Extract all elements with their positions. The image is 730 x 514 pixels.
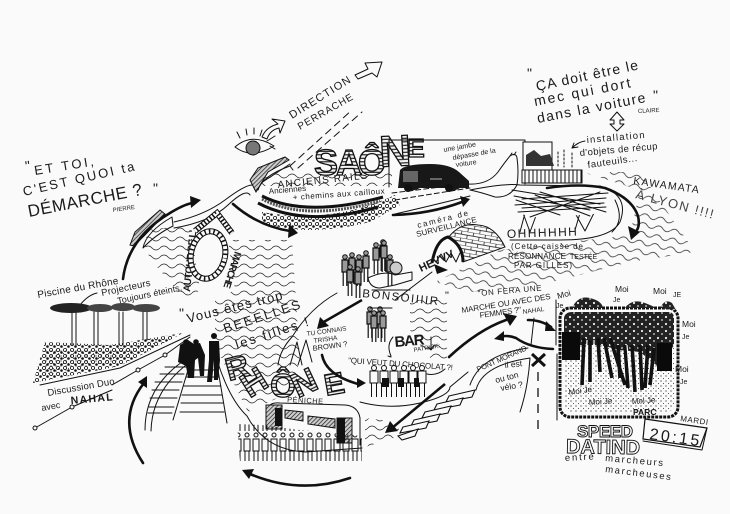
text: moi je around park: Je <box>556 303 564 310</box>
quote: on fera une marche: FEMMES ?" <box>479 305 522 320</box>
text: caméra de surveillance: SURVEILLANCE <box>415 215 478 239</box>
arrow: to people row <box>322 355 366 388</box>
text: moi je around park: Moi <box>675 364 689 374</box>
text: moi je inside park <box>568 385 656 417</box>
quote: et toi, c'est quoi ta démarche: " <box>153 180 158 196</box>
text: moi je around park: Moi <box>615 284 629 294</box>
title: RHÔNE letters: R <box>221 347 253 388</box>
quote: et toi, c'est quoi ta démarche: C'EST QUOI ta <box>21 158 136 199</box>
arrow: down to river <box>385 384 445 433</box>
text: tu connais trisha brown: TU CONNAIS <box>306 325 348 338</box>
icon: eye with arrow <box>235 119 285 155</box>
text: bonsoiiiir: BONSOIIIIR <box>362 288 439 308</box>
peniche: boat <box>266 395 360 445</box>
title: SAÔNE letters: A <box>336 142 362 183</box>
text: il est ou ton vélo: il est <box>504 358 523 370</box>
icon: direction arrow top <box>290 62 382 168</box>
stairs: pont morand stairs <box>398 390 475 440</box>
bridge: lower bridge hatch <box>130 210 173 248</box>
text: piscine du rhone: Piscine du Rhône <box>37 276 120 301</box>
text: piscine du rhone: Projecteurs <box>100 278 152 299</box>
text: piscine du rhone <box>37 276 183 306</box>
text: installation d'objets de récup: installation <box>586 130 645 146</box>
text: bar <box>388 331 441 357</box>
text: kawamata à lyon: KAWAMATA <box>633 175 700 196</box>
label: direction perrache: DIRECTION <box>287 74 353 122</box>
text: moi je around park: Moi <box>682 319 696 329</box>
text: discussion duo avec nahal: avec <box>41 400 62 413</box>
box: tree tops above park <box>572 297 676 310</box>
title: RHÔNE letters: N <box>285 361 324 405</box>
icon: x and dashed road <box>531 300 557 432</box>
text: bonsoiiiir: " <box>445 290 449 302</box>
text: anciens rails: ANCIENS RAILS <box>277 171 368 191</box>
quote: ça doit être le mec: dans la voiture <box>536 89 647 126</box>
text: autour de l'O marche: AUTOUR DE L' <box>182 230 199 292</box>
text: speed dating <box>566 422 640 459</box>
crowd: people at peniche <box>218 363 468 461</box>
text: entre marcheurs marcheuses <box>565 451 672 483</box>
text: jambe: dépasse de la <box>452 147 496 162</box>
text: moi je around park: Je <box>613 297 620 304</box>
text: installation d'objets de récup: d'objets de récup <box>579 141 658 159</box>
quote: et toi, c'est quoi ta démarche <box>21 154 158 221</box>
quote: ça doit être le mec: " <box>653 87 658 103</box>
tunnel <box>432 225 505 274</box>
arrow: left bank up <box>123 196 201 279</box>
quote: ça doit être le mec: " <box>527 65 532 81</box>
text: moi je around park: Je <box>680 379 688 386</box>
title: RHÔNE letters: H <box>234 360 275 405</box>
text: moi je around park <box>556 284 696 386</box>
arrow: bottom <box>242 469 350 486</box>
illustration: piscine parasols <box>50 303 160 345</box>
clock: mardi 20:15 <box>643 414 709 450</box>
waves: river areas <box>145 172 695 447</box>
text: speed dating: DATIND <box>566 436 640 459</box>
text: discussion duo avec nahal: NAHAL <box>70 391 114 407</box>
quote: et toi, c'est quoi ta démarche: " <box>24 157 31 174</box>
peniche: boat: PÉNICHE <box>287 395 323 406</box>
title: RHÔNE letters <box>221 340 347 405</box>
text: entre marcheurs marcheuses: marcheurs <box>605 453 664 469</box>
bridge: pont morand: PONT MORAND <box>475 343 529 374</box>
quote: on fera une marche: NAHAL <box>522 306 545 316</box>
title: SAÔNE letters <box>314 126 425 183</box>
text: hevvv <box>395 248 457 300</box>
text: hevvv: HEVVV <box>417 248 457 275</box>
text: bar: PATRICK: <box>413 343 441 354</box>
text: ohhh and cette caisse <box>507 225 598 270</box>
park: parc panel with trees <box>560 308 678 417</box>
text: ohhh and cette caisse: RÉSONNANCE <box>508 252 566 261</box>
text: caméra de surveillance: caméra de <box>416 208 469 230</box>
text: speed dating: SPEED <box>577 422 633 441</box>
small arrow to installation <box>572 141 585 148</box>
bridge: pont morand <box>470 343 530 412</box>
text: moi je around park: JE <box>673 292 682 299</box>
text: anciens rails <box>268 171 385 202</box>
text: il est ou ton vélo <box>494 358 524 393</box>
arrows: park in and out <box>494 320 556 349</box>
title: SAÔNE letters: N <box>378 126 412 177</box>
title: SAÔNE letters: Ô <box>358 141 386 183</box>
quote: vous êtes trop beeelles: les filles ! <box>233 314 310 352</box>
text: moi je around park: Moi <box>653 286 667 296</box>
bridge: upper bridge hatch and road <box>174 157 293 228</box>
text: ohhh and cette caisse: TESTÉE <box>570 252 598 261</box>
rails: curved tracks and gravel <box>258 184 470 230</box>
stairs: main staircase <box>145 355 227 431</box>
text: entre marcheurs marcheuses: entre <box>565 451 594 464</box>
text: moi je inside park: Moi Je <box>632 395 656 406</box>
text: installation d'objets de récup <box>579 130 658 171</box>
text: autour de l'O marche: MARCHE <box>220 250 243 290</box>
text: moi je around park: Moi <box>556 288 572 301</box>
text: discussion duo avec nahal <box>41 376 115 413</box>
text: tu connais trisha brown: BROWN ? <box>312 339 348 353</box>
text: anciens rails: + chemins aux cailloux <box>293 187 385 202</box>
icon: ring O and ladder <box>186 213 232 282</box>
text: qui veut du chocolat: "QUI VEUT DU CHOCOLAT ?! <box>348 356 453 372</box>
text: piscine du rhone: Toujours éteints. <box>116 282 183 306</box>
quote: vous êtes trop beeelles: Vous êtes trop <box>185 288 284 326</box>
arrow: double vertical <box>610 112 624 131</box>
text: ohhh and cette caisse: OHHHHHH <box>507 225 577 241</box>
line: walking route with nodes <box>33 337 190 430</box>
arrow: from bonsoir to Rhône <box>278 293 362 365</box>
text: moi je inside park: PARC <box>633 407 656 417</box>
text: jambe <box>443 141 496 169</box>
arrow: along road <box>393 196 470 215</box>
text: installation d'objets de récup: fauteuils... <box>587 153 638 171</box>
text: jambe: une jambe <box>443 141 477 154</box>
car: van <box>398 164 469 192</box>
quote: ça doit être le mec: mec qui dort <box>533 75 632 109</box>
quote: ça doit être le mec: ÇA doit être le <box>534 57 640 94</box>
text: il est ou ton vélo: vélo ? <box>500 379 524 393</box>
crowd of dots: pool bank <box>33 333 190 385</box>
clock: mardi 20:15: 20:15 <box>648 426 700 450</box>
quote: et toi, c'est quoi ta démarche: PIERRE <box>112 205 135 214</box>
text: il est ou ton vélo: ou ton <box>494 369 520 385</box>
quote: et toi, c'est quoi ta démarche: DÉMARCHE ? <box>26 180 144 221</box>
road: kawamata road <box>395 185 622 240</box>
quote: on fera une marche: MARCHE OU AVEC DES <box>461 292 551 315</box>
quote: ça doit être le mec <box>527 57 660 126</box>
quote: on fera une marche <box>461 283 551 320</box>
text: tu connais trisha brown: TRISHA <box>313 335 339 345</box>
quote: vous êtes trop beeelles: " <box>179 305 184 321</box>
arrow: up to stairs <box>129 376 147 463</box>
title: SAÔNE letters: S <box>314 142 338 183</box>
illustration: leg <box>468 152 518 197</box>
text: ohhh and cette caisse: (Cette caisse de <box>511 242 584 251</box>
text: discussion duo avec nahal: Discussion Duo <box>47 376 115 399</box>
title: RHÔNE letters: E <box>322 367 347 403</box>
arrow: under bridge <box>233 204 298 238</box>
people row: chocolate <box>370 366 426 397</box>
clock: mardi 20:15: MARDI <box>680 414 709 427</box>
quote: et toi, c'est quoi ta démarche: ET TOI, <box>33 154 95 178</box>
text: entre marcheurs marcheuses: marcheuses <box>605 464 672 483</box>
quote: vous êtes trop beeelles <box>179 288 310 352</box>
arrow: from chocolate to femmes <box>449 313 517 357</box>
arrow: kawamata loop <box>547 186 640 240</box>
text: moi je inside park: Moi Je <box>589 396 613 407</box>
people group below bonsoir <box>367 307 392 342</box>
text: kawamata à lyon: À LYON !!!! <box>634 186 715 222</box>
quote: ça doit être le mec: CLAIRE <box>638 108 660 115</box>
installation: wooden structure <box>512 190 608 232</box>
title: RHÔNE letters: Ô <box>270 366 296 404</box>
text: jambe: voiture <box>455 159 477 169</box>
title: SAÔNE letters: E <box>407 133 425 163</box>
group of people centre <box>342 240 412 298</box>
text: ohhh and cette caisse: PAR GILLES) <box>514 261 572 270</box>
text: moi je inside park: Moi Je <box>568 385 593 397</box>
text: anciens rails: Anciennes <box>268 184 306 196</box>
wall behind car <box>389 140 525 187</box>
people: three silhouettes on stairs <box>178 333 220 382</box>
quote: on fera une marche: "ON FERA UNE <box>477 283 542 298</box>
text: bar: BAR <box>394 331 425 351</box>
text: moi je around park: Je <box>682 334 690 341</box>
text: tu connais trisha brown <box>306 325 348 353</box>
installation: crate and objects <box>522 142 582 183</box>
quote: vous êtes trop beeelles: BEEELLES <box>221 297 302 336</box>
text: autour de l'O marche <box>182 230 243 292</box>
label: direction perrache: PERRACHE <box>296 92 355 133</box>
